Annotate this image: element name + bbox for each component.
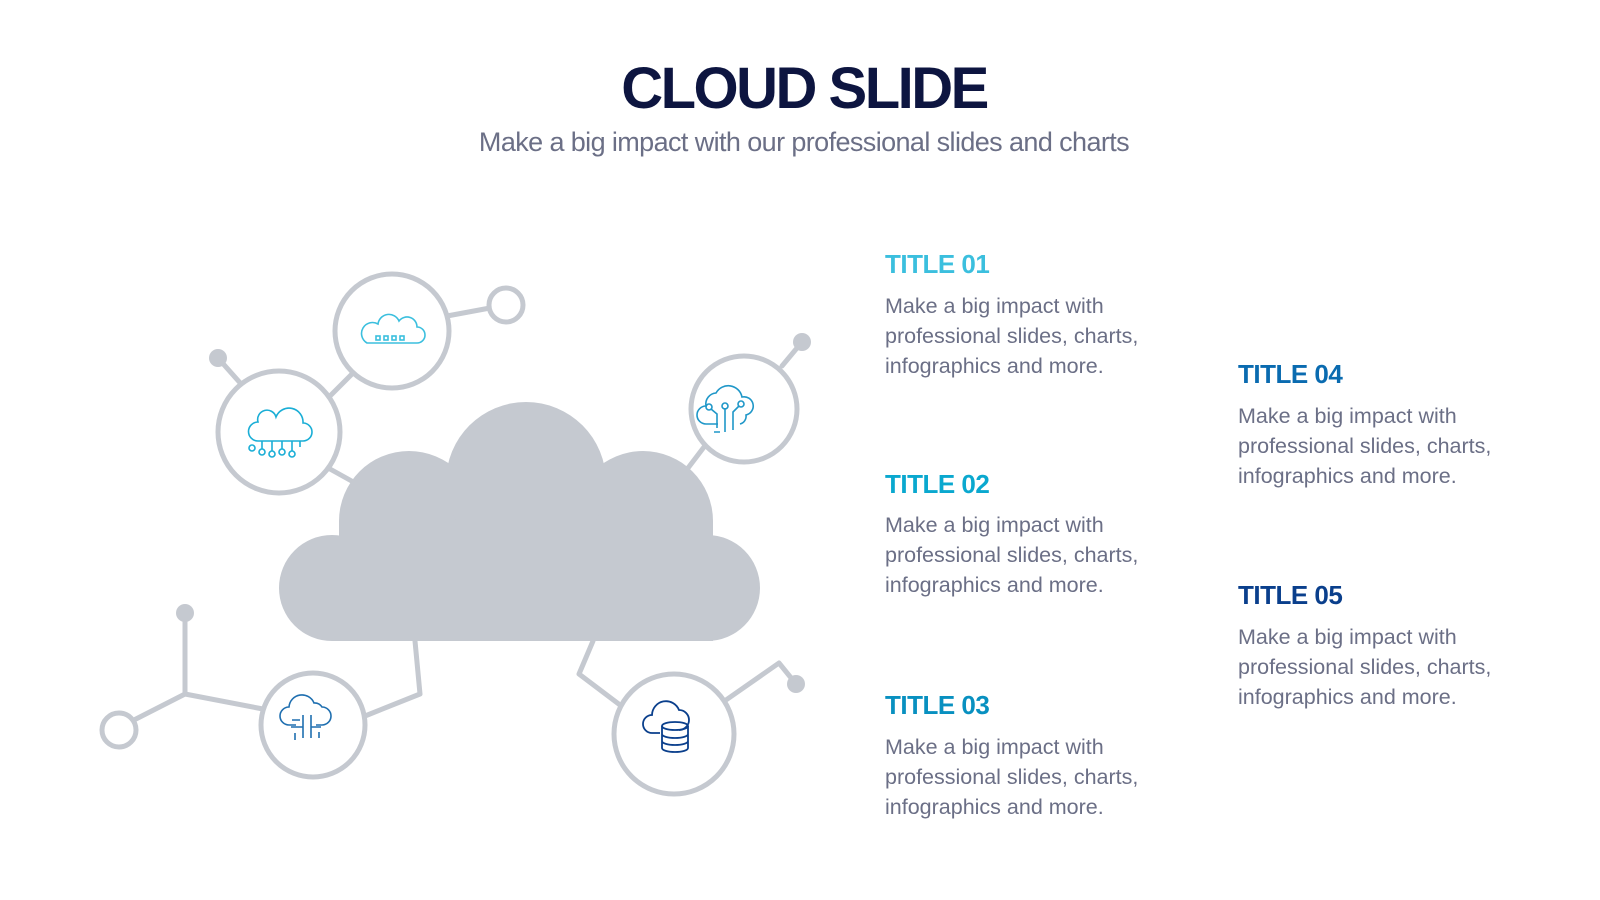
- text block: title 03: [885, 690, 1138, 819]
- text block: title 03: Make a big impact with professional slides, charts, infographics and more.: [885, 735, 1138, 819]
- text block: title 02: Make a big impact with professional slides, charts, infographics and more.: [885, 513, 1138, 597]
- end dots and rings: [176, 333, 811, 693]
- text block: title 02: TITLE 02: [885, 469, 989, 499]
- icon: cloud network: [248, 408, 312, 457]
- text block: title 01: [885, 249, 1138, 378]
- text block: title 05: TITLE 05: [1238, 580, 1342, 610]
- text block: title 04: [1238, 359, 1491, 488]
- big cloud: [279, 402, 760, 641]
- icon: cloud tree: [697, 386, 753, 432]
- icon: cloud top: [362, 314, 425, 343]
- text block: title 01: TITLE 01: [885, 249, 989, 279]
- text block: title 02: [885, 469, 1138, 597]
- text block: title 05: [1238, 580, 1491, 709]
- icon: cloud data: [280, 695, 331, 740]
- text block: title 03: TITLE 03: [885, 690, 989, 720]
- text block: title 05: Make a big impact with professional slides, charts, infographics and more.: [1238, 625, 1491, 709]
- text block: title 04: TITLE 04: [1238, 359, 1342, 389]
- icon: cloud database: [643, 701, 689, 752]
- icon circles: [218, 274, 797, 794]
- title: CLOUD SLIDE: [621, 56, 987, 121]
- subtitle: Make a big impact with our professional slides and charts: [479, 127, 1129, 157]
- diagram: [100, 272, 811, 796]
- text block: title 04: Make a big impact with professional slides, charts, infographics and more.: [1238, 404, 1491, 488]
- text block: title 01: Make a big impact with professional slides, charts, infographics and more.: [885, 294, 1138, 378]
